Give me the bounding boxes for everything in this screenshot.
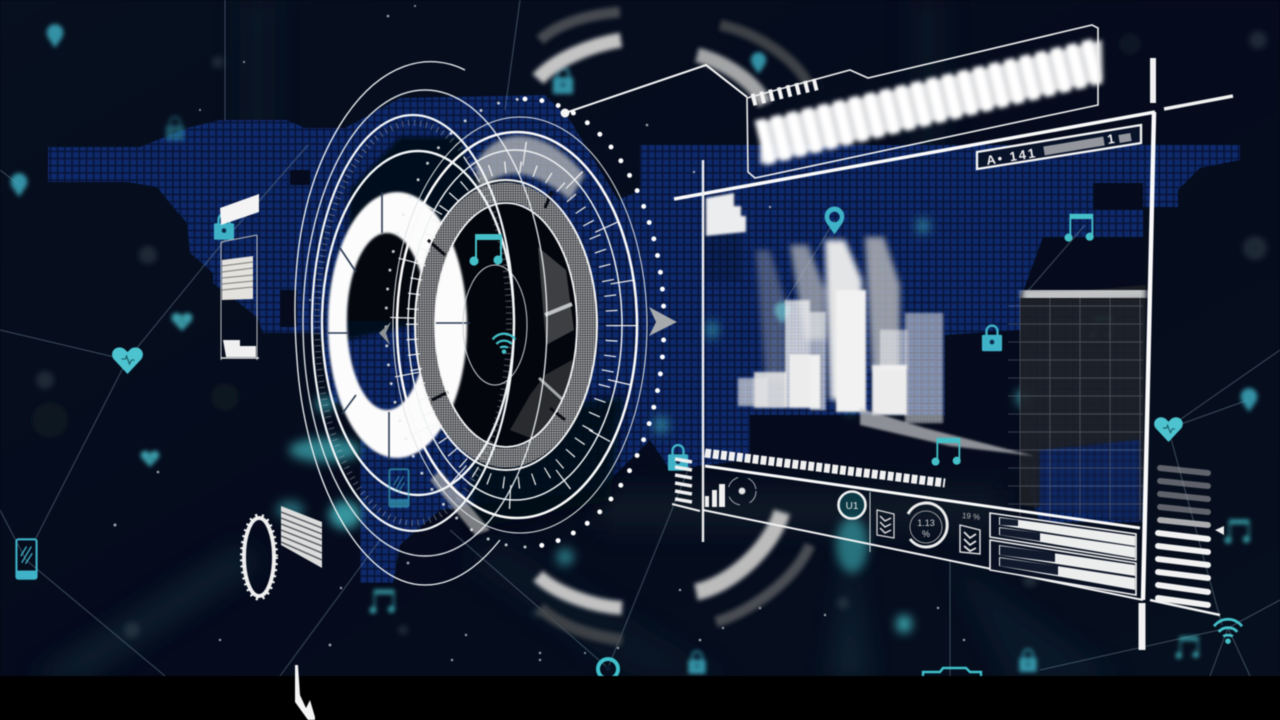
- vertical divider: [869, 492, 871, 552]
- panel left grey glow: [1019, 298, 1041, 430]
- percentage gauge: [908, 503, 947, 547]
- top grey band: [475, 136, 585, 200]
- dark interior of right ring: [434, 203, 578, 447]
- icon: camera at bottom edge: [923, 668, 981, 676]
- left edge line: [702, 160, 704, 542]
- white segmented donut: [328, 192, 470, 460]
- equalizer chart: [738, 237, 1034, 456]
- hatched ring: [425, 192, 587, 458]
- right edge line: [1143, 112, 1154, 600]
- long spokes: [402, 153, 626, 497]
- panel left foot line: [672, 504, 700, 511]
- icon: phone left: [16, 539, 37, 579]
- upper right tick: [1150, 58, 1156, 103]
- icon: phone centre: [389, 469, 409, 507]
- inner fine circle: [463, 265, 527, 385]
- outermost thin ring: [393, 117, 647, 533]
- striped hatch panel: [281, 506, 322, 568]
- lower grey streak: [430, 470, 490, 535]
- blurred tall bars: [756, 237, 900, 400]
- dark stripes: [222, 262, 253, 290]
- connector line to panel: [565, 65, 747, 113]
- stripes: [752, 83, 822, 100]
- white glitch shape: [295, 665, 315, 720]
- percentage label: 19 %: [962, 511, 981, 522]
- translucent right panel area: [1020, 285, 1146, 522]
- third ring: [312, 115, 514, 531]
- progress bars group 1: [990, 513, 1136, 560]
- percentage gauge: 1.13: [917, 518, 935, 528]
- blue map through panel: [1040, 440, 1140, 522]
- dashed progress row: [705, 453, 945, 483]
- lower right tick: [1138, 603, 1146, 650]
- chevron box small: [877, 510, 894, 538]
- fourth ring: [322, 151, 514, 495]
- inner ring outline: [435, 203, 577, 447]
- right ring group: [379, 65, 747, 547]
- outer thin arc: [295, 62, 500, 585]
- panel inner grid: [1008, 290, 1143, 520]
- gear ring: [242, 516, 276, 598]
- top header panel: [747, 25, 1103, 178]
- panel top edge: [674, 112, 1155, 199]
- ticks between rings: [317, 123, 509, 523]
- bottom black letterbox bar: [0, 676, 1280, 720]
- progress bars group 2: [990, 540, 1136, 595]
- icon: lock lower: [668, 445, 688, 471]
- top-left text block: [706, 193, 746, 236]
- ring outer bright: [397, 132, 637, 518]
- icon: music note centre: [469, 234, 503, 266]
- bottom border: [703, 510, 1143, 600]
- hatched ring outline: [415, 180, 597, 470]
- arrowhead right: [649, 307, 677, 336]
- frame lines: [221, 235, 257, 360]
- left small data widgets: [220, 194, 259, 360]
- right striped block: [1150, 468, 1224, 615]
- readout label: [977, 125, 1141, 169]
- circular U1 gauge: [838, 492, 866, 518]
- icon: location pin on map: [825, 206, 844, 234]
- grey wedges: [538, 247, 574, 345]
- panel top grey glow: [1022, 292, 1146, 296]
- icon: wifi centre: [493, 334, 515, 354]
- base rule: [221, 357, 259, 359]
- percentage gauge: %: [922, 529, 930, 539]
- circular U1 gauge: U1: [846, 501, 859, 512]
- left striped block of panel: [675, 459, 692, 502]
- readout label: 1: [1106, 131, 1116, 147]
- signal bars icon: [705, 484, 725, 507]
- icon: music note panel: [1064, 214, 1094, 242]
- hatch gaps: [428, 191, 565, 420]
- icon: lock on map: [982, 326, 1002, 351]
- icon: music note on chart: [931, 438, 961, 466]
- chevron box large: [960, 525, 980, 554]
- arrowhead left: [379, 322, 391, 345]
- icon: location pin at bottom edge: [598, 659, 618, 679]
- left ring group: [295, 62, 547, 585]
- right horizontal tick: [1164, 96, 1233, 109]
- ring middle: [408, 150, 622, 500]
- icon: wifi bottom right: [1214, 619, 1242, 644]
- icon: lock left: [214, 214, 234, 240]
- second divider: [705, 466, 1140, 528]
- chevron bar: [760, 40, 1103, 164]
- panel frame outline: [747, 25, 1098, 178]
- second ring: [303, 90, 547, 556]
- mini dial icon: [728, 477, 756, 505]
- main perspective panel: [674, 58, 1233, 650]
- icon: heart left: [112, 347, 143, 374]
- blurred grey arcs: [538, 12, 810, 640]
- readout label: A• 141: [985, 145, 1038, 168]
- blurred teal glows: [276, 218, 1032, 633]
- pixel bars: [738, 290, 943, 423]
- icon: heart right: [1154, 417, 1183, 442]
- scattered particles: [114, 5, 965, 661]
- dotted outer circle left half: [386, 99, 525, 547]
- bottom data block: [223, 340, 256, 357]
- white label bar: [220, 194, 259, 225]
- connector node: [560, 108, 570, 118]
- dotted outer circle right half: [525, 99, 664, 547]
- tick band: [412, 167, 612, 483]
- world map in blue pixel grid: [48, 95, 1240, 583]
- chart floor streak: [860, 408, 1034, 456]
- striped data block: [222, 256, 253, 300]
- panel right grey glow: [1133, 300, 1143, 510]
